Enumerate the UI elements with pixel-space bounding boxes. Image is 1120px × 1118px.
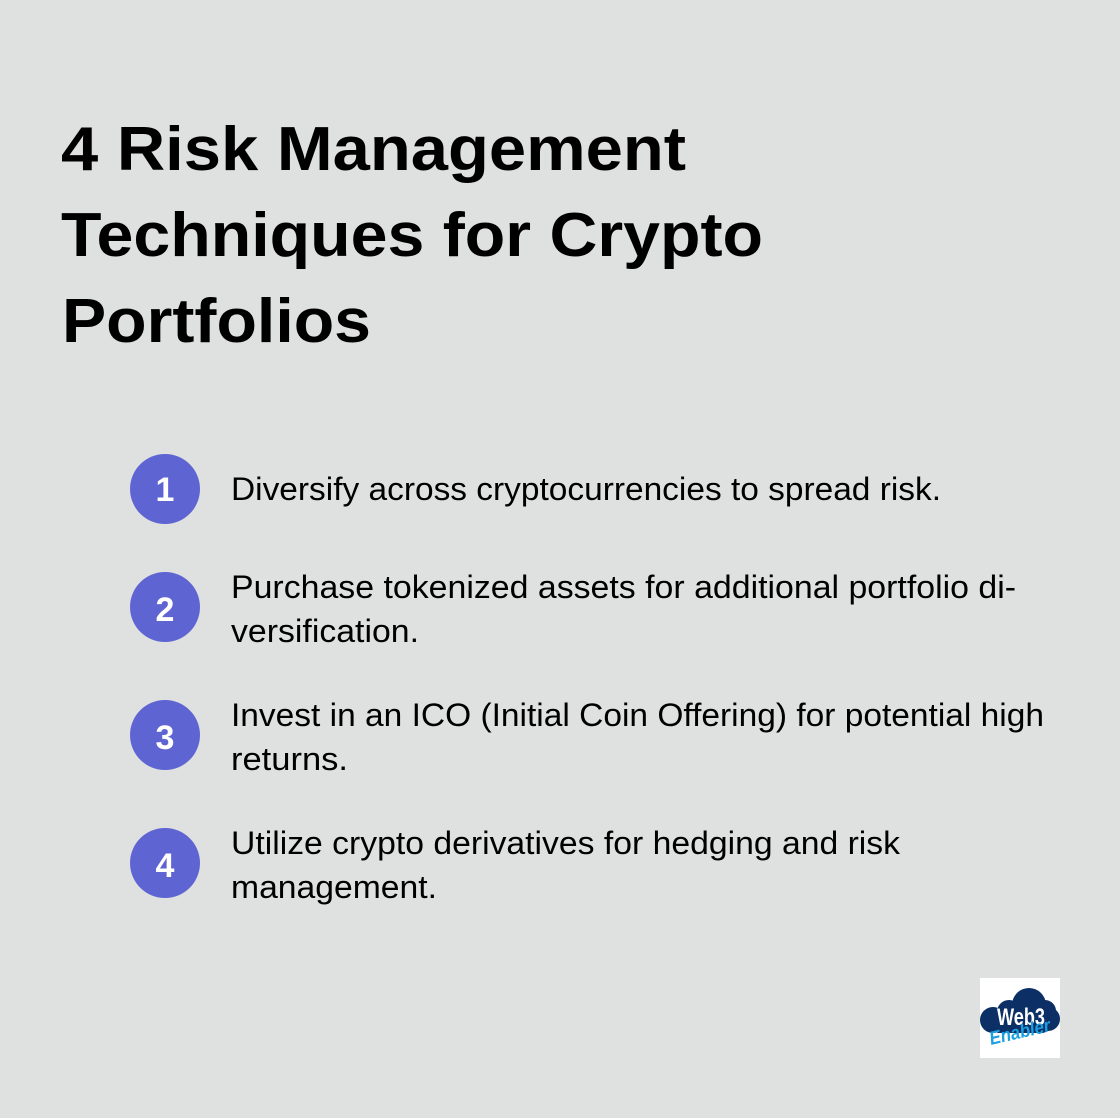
number badge 4: 4 [156, 847, 175, 885]
item 2 [130, 569, 1016, 649]
item 3 [130, 697, 1044, 777]
item 4 [130, 825, 901, 905]
number badge 4 [130, 828, 200, 898]
logo: Web3 Enabler [980, 978, 1060, 1058]
title: Techniques for Crypto [61, 201, 763, 270]
text: item 2 [231, 569, 1016, 649]
text: item 3: Invest in an ICO (Initial Coin Offering) for potential high [231, 697, 1044, 733]
text: item 4 [231, 825, 901, 905]
text: item 1: Diversify across cryptocurrencies to spread risk. [231, 471, 941, 507]
text: item 2: versification. [231, 613, 419, 649]
text: item 3: returns. [231, 741, 348, 777]
text: item 2: Purchase tokenized assets for additional portfolio di- [231, 569, 1016, 605]
logo wordmark: Web3 [997, 1004, 1045, 1031]
number badge 3 [130, 700, 200, 770]
title: Portfolios [62, 287, 371, 356]
number badge 1: 1 [156, 471, 174, 509]
icon: cloud [980, 988, 1060, 1033]
text: item 3 [231, 697, 1044, 777]
item 1 [130, 454, 941, 524]
text: item 4: management. [231, 869, 437, 905]
logo script: Enabler [987, 1015, 1054, 1050]
number badge 2: 2 [156, 591, 174, 629]
number badge 1 [130, 454, 200, 524]
text: item 4: Utilize crypto derivatives for hedging and risk [231, 825, 901, 861]
title: 4 Risk Management [61, 115, 686, 184]
title [61, 115, 763, 356]
number badge 2 [130, 572, 200, 642]
number badge 3: 3 [156, 719, 174, 757]
